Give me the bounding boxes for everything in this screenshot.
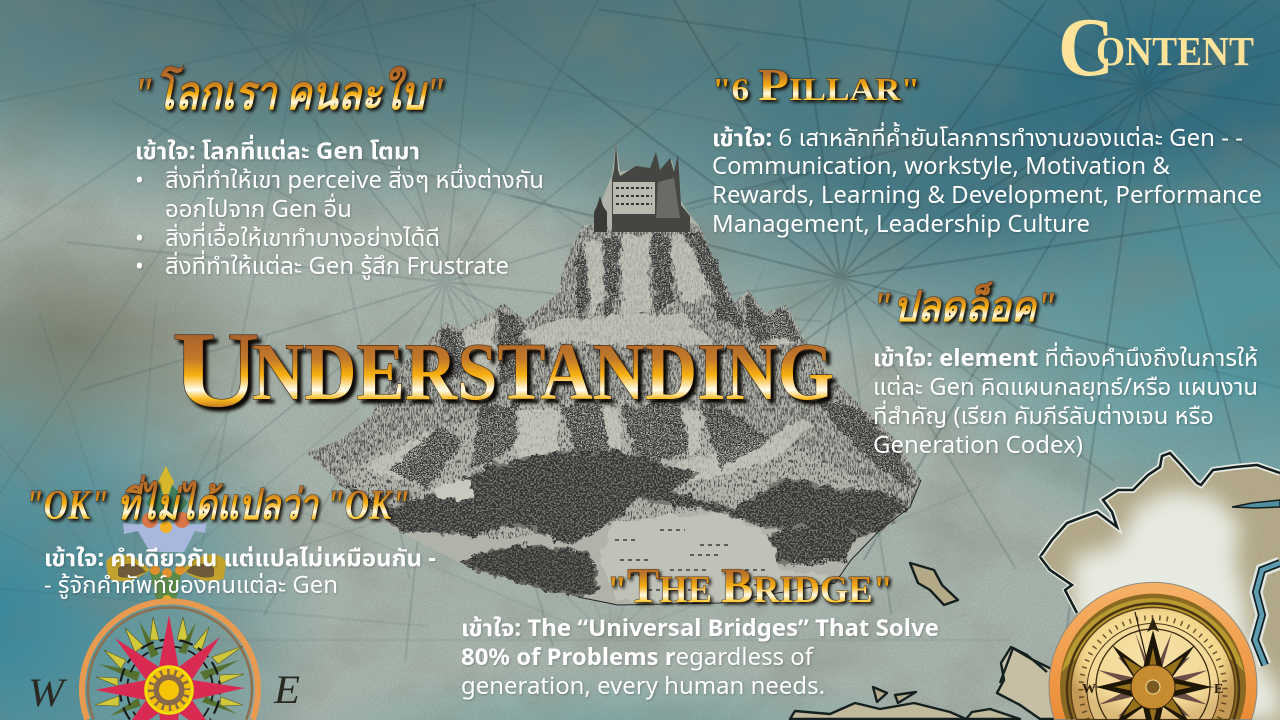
- panel: OK: [25, 475, 436, 600]
- title: Understanding: U: [172, 311, 260, 430]
- text block: เข้าใจ: คำเดียวกัน แต่แปลไม่เหมือนกัน -: [44, 541, 436, 573]
- rock hatching: [307, 222, 921, 507]
- text block: สิ่งที่ทำให้แต่ละ Gen รู้สึก Frustrate: [165, 249, 509, 281]
- text block: •: [135, 163, 144, 195]
- mountain silhouette: [307, 143, 921, 605]
- compass rose: lower left: [82, 466, 258, 720]
- text block: Communication, workstyle, Motivation &: [712, 149, 1171, 181]
- illustration: castle on mountain: [307, 143, 921, 605]
- panel: unlock: [872, 281, 1258, 460]
- lower forest: [460, 525, 860, 596]
- text block: ที่สำคัญ (เรียก คัมภีร์ลับต่างเจน หรือ: [873, 399, 1214, 431]
- text block: 80% of Problems regardless of: [461, 640, 815, 672]
- text block: แต่ละ Gen คิดแผนกลยุทธ์/หรือ แผนงาน: [873, 370, 1258, 402]
- text block: Rewards, Learning & Development, Performance: [712, 178, 1262, 210]
- compass: lower right: [1049, 582, 1257, 720]
- islands: small lower middle: [790, 563, 1060, 719]
- text block: [873, 341, 1258, 460]
- text block: สิ่งที่ทำให้เขา perceive สิ่งๆ หนึ่งต่างกัน: [165, 163, 544, 195]
- text block: [712, 121, 1262, 239]
- compass: lower right: W: [1082, 682, 1096, 697]
- text block: Generation Codex): [873, 428, 1083, 460]
- heading: "6 PILLAR": [712, 59, 920, 110]
- ring: [82, 601, 258, 720]
- text block: •: [135, 221, 144, 253]
- ornament: fleur-de-lis crest: [106, 466, 226, 605]
- heading: Content: ONTENT: [1096, 28, 1254, 74]
- letters: W and E: [28, 667, 300, 715]
- text block: เข้าใจ: The “Universal Bridges” That Solve: [461, 611, 939, 643]
- heading: Content: C: [1058, 1, 1114, 94]
- letters: W and E: W: [28, 670, 68, 715]
- forest band: [337, 450, 912, 545]
- heading: "THE BRIDGE": [607, 557, 893, 613]
- text block: Management, Leadership Culture: [712, 207, 1090, 239]
- text block: - รู้จักคำศัพท์ของคนแต่ละ Gen: [44, 568, 338, 600]
- title: Understanding: [172, 311, 834, 430]
- red star: [95, 615, 245, 720]
- text block: •: [135, 249, 144, 281]
- white rock: [432, 478, 472, 500]
- light rock faces: [365, 234, 812, 480]
- panel: world view: [133, 65, 544, 281]
- text block: generation, every human needs.: [461, 669, 825, 701]
- heading: "OK" ที่ไม่ได้แปลว่า "OK": [25, 475, 410, 529]
- text block: ออกไปจาก Gen อื่น: [165, 192, 352, 224]
- thin needles: [1088, 632, 1218, 719]
- panel: the bridge: [461, 557, 939, 701]
- sun centre: [146, 667, 192, 713]
- text block: [44, 541, 436, 600]
- text block: [461, 611, 939, 701]
- heading: "โลกเรา คนละใบ": [133, 65, 446, 120]
- valley ground: [600, 512, 830, 603]
- text block: เข้าใจ: element ที่ต้องคำนึงถึงในการให้: [873, 341, 1258, 373]
- text block: [135, 134, 544, 281]
- island: mainland lower right: [1030, 445, 1280, 720]
- letters: W and E: E: [273, 667, 300, 712]
- compass: lower right: E: [1214, 682, 1223, 697]
- heading: Content: [1058, 1, 1254, 94]
- text block: สิ่งที่เอื้อให้เขาทำบางอย่างได้ดี: [165, 221, 440, 253]
- text block: เข้าใจ: 6 เสาหลักที่ค้ำยันโลกการทำงานของแต่ละ Gen - -: [712, 121, 1243, 153]
- overall hatching: [307, 225, 921, 540]
- title: Understanding: NDERSTANDING: [252, 326, 834, 417]
- castle: [594, 143, 690, 232]
- yellow and olive points: [95, 617, 244, 706]
- panel: 6 pillar: [712, 59, 1262, 239]
- text block: เข้าใจ: โลกที่แต่ละ Gen โตมา: [135, 134, 420, 166]
- gold star: [1096, 630, 1212, 720]
- heading: "ปลดล็อค": [872, 281, 1057, 331]
- dashed ring: [120, 639, 220, 720]
- rock shadows: [390, 230, 915, 490]
